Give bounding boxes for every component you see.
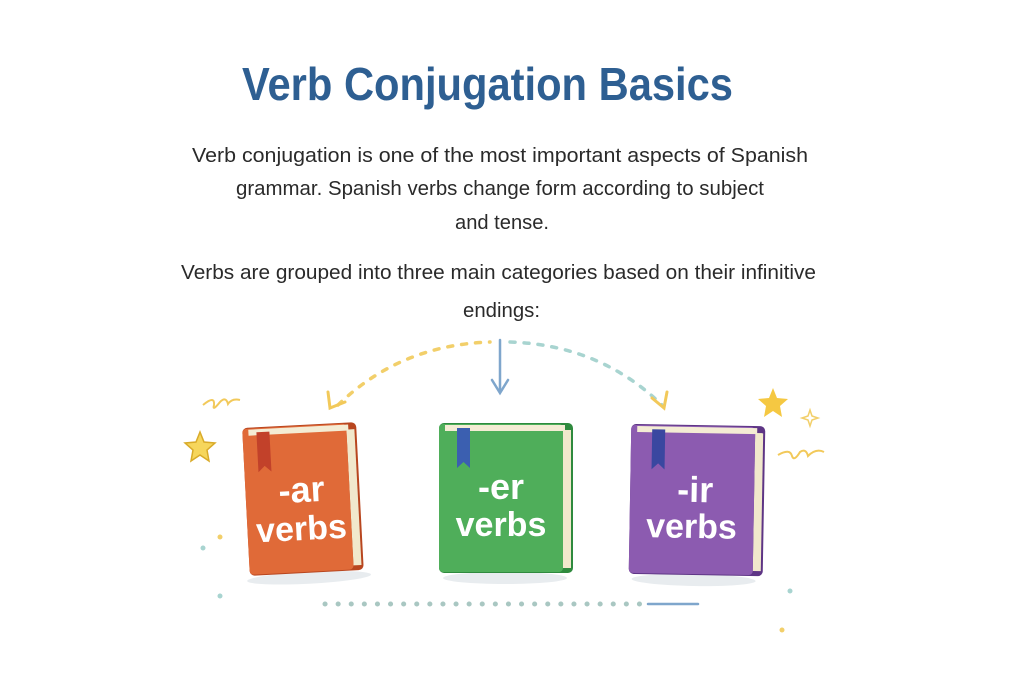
book: -ir verbs	[629, 424, 765, 587]
dotted baseline	[325, 602, 698, 606]
decorations: stars and swirls	[185, 388, 824, 632]
intro paragraph: and tense.	[455, 212, 549, 234]
arrows: dotted arc	[328, 342, 667, 408]
book: -ir verbs: -ir	[677, 469, 714, 510]
book: -ar verbs: verbs	[255, 508, 348, 550]
intro paragraph	[192, 145, 808, 234]
book: -ir verbs: verbs	[646, 507, 737, 547]
categories paragraph: endings:	[463, 300, 540, 322]
arrow: center down	[492, 340, 508, 393]
categories paragraph	[181, 262, 816, 322]
intro paragraph: Verb conjugation is one of the most important aspects of Spanish	[192, 145, 808, 167]
book: -ar verbs: -ar	[277, 468, 326, 511]
categories paragraph: Verbs are grouped into three main categories based on their infinitive	[181, 262, 816, 284]
intro paragraph: grammar. Spanish verbs change form according to subject	[236, 178, 764, 200]
book: -ar verbs	[239, 422, 371, 587]
title: Verb Conjugation Basics	[242, 58, 733, 110]
book: -er verbs	[439, 423, 573, 584]
book: -er verbs: -er	[478, 466, 524, 507]
book: -er verbs: verbs	[456, 506, 546, 544]
